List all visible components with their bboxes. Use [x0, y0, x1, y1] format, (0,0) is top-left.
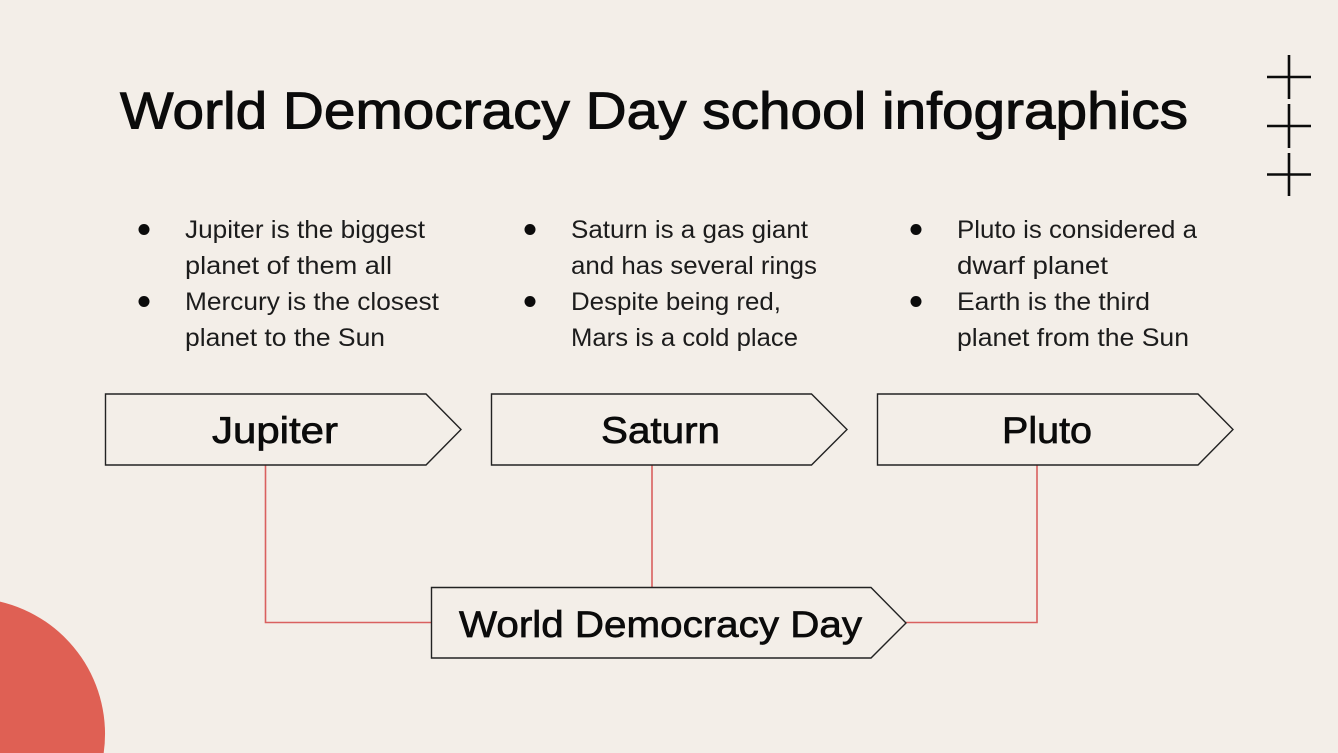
- icon: three plus signs: [1267, 55, 1311, 196]
- text block: Saturn bullets: Saturn is a gas giant: [571, 216, 808, 244]
- title: World Democracy Day school infographics: [120, 82, 1188, 140]
- connector: Jupiter to World Democracy Day: [266, 465, 432, 622]
- text block: Saturn bullets: [524, 216, 817, 352]
- text block: Saturn bullets: Despite being red,: [571, 288, 781, 316]
- text block: Pluto bullets: dwarf planet: [957, 252, 1108, 280]
- text block: Pluto bullets: Earth is the third: [957, 288, 1150, 316]
- text block: Jupiter bullets: planet of them all: [185, 252, 392, 280]
- text block: Pluto bullets: [910, 216, 1197, 352]
- text block: Jupiter bullets: [138, 216, 439, 352]
- text block: Saturn bullets: and has several rings: [571, 252, 817, 280]
- arrow label: World Democracy Day: World Democracy Day: [459, 604, 863, 645]
- connector: Saturn to World Democracy Day: [651, 465, 653, 587]
- text block: Pluto bullets: planet from the Sun: [957, 324, 1189, 352]
- arrow label: Jupiter: Jupiter: [212, 410, 338, 451]
- arrow label: Pluto: [878, 394, 1233, 465]
- text block: Jupiter bullets: planet to the Sun: [185, 324, 385, 352]
- arrow label: Saturn: Saturn: [601, 410, 720, 451]
- text block: Jupiter bullets: Jupiter is the biggest: [185, 216, 425, 244]
- text block: Jupiter bullets: Mercury is the closest: [185, 288, 439, 316]
- connector: Pluto to World Democracy Day: [906, 465, 1037, 622]
- arrow label: Jupiter: [106, 394, 461, 465]
- text block: Saturn bullets: Mars is a cold place: [571, 324, 798, 352]
- arrow label: Pluto: Pluto: [1002, 410, 1092, 451]
- arrow label: Saturn: [492, 394, 847, 465]
- text block: Pluto bullets: Pluto is considered a: [957, 216, 1197, 244]
- arrow label: World Democracy Day: [432, 588, 906, 658]
- decorative red circle: [0, 602, 105, 753]
